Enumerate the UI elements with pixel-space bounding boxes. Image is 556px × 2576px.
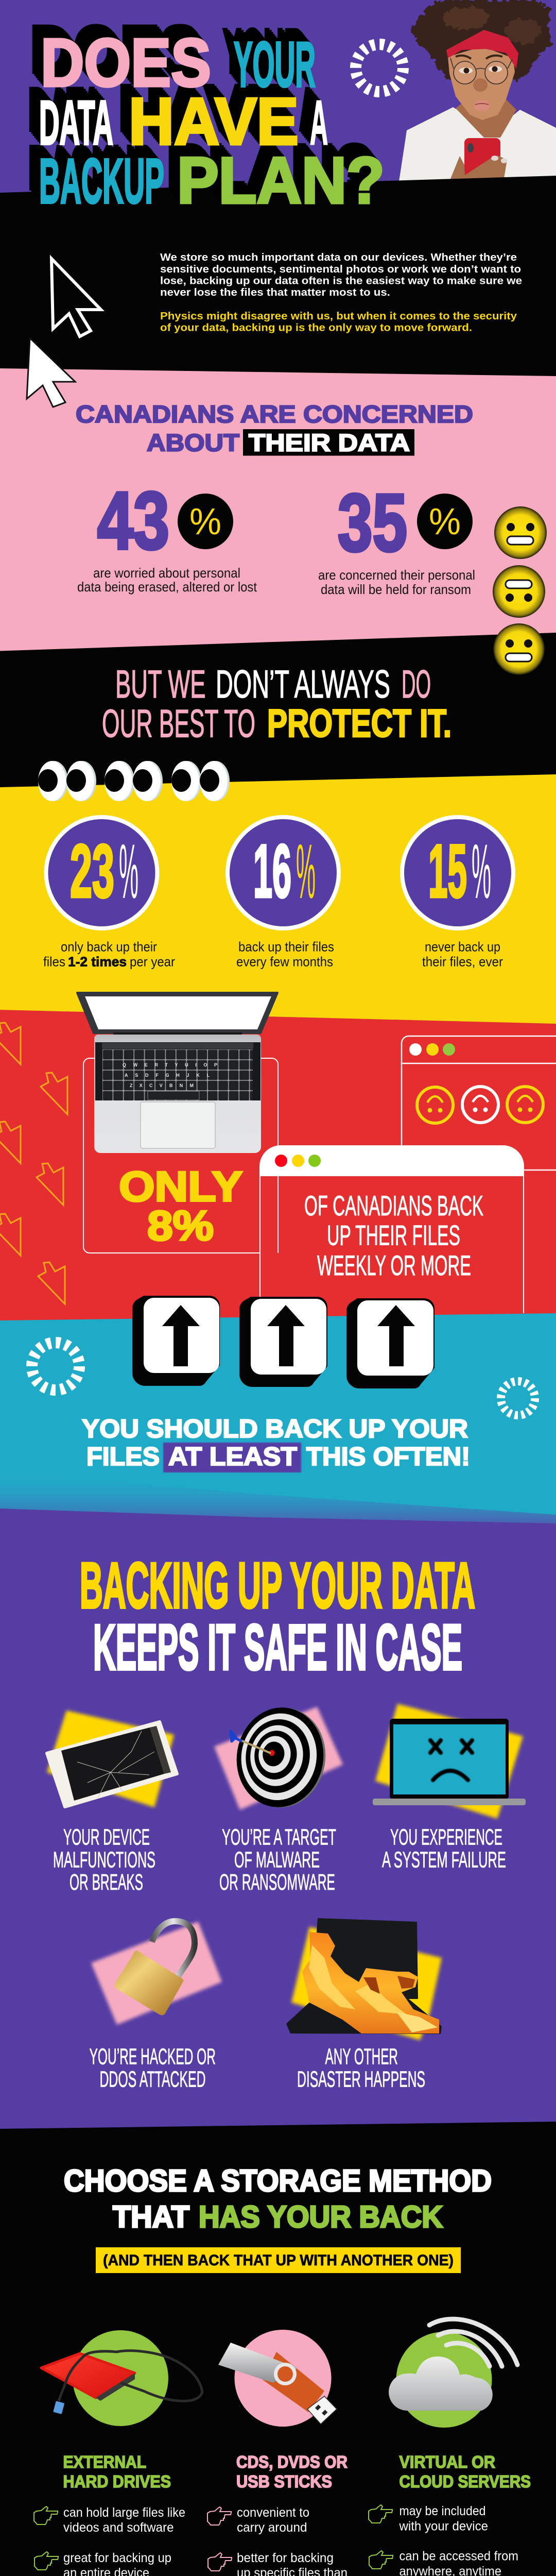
captions row two: DDOS ATTACKED bbox=[100, 2067, 206, 2092]
stat: 23 percent: per year bbox=[130, 954, 175, 970]
panel: you should back up bbox=[0, 1296, 556, 1523]
column: CDs, DVDs or USB sticks: CDS, DVDS OR bbox=[236, 2452, 348, 2471]
icon: upside-down grimacing emoji bbox=[493, 565, 545, 618]
stat: 35 percent: data will be held for ransom bbox=[321, 582, 471, 597]
illustration: laptop: ASDFGHJKL bbox=[125, 1073, 210, 1078]
stat: 23 percent: % bbox=[119, 828, 138, 914]
heading: THAT bbox=[113, 2200, 189, 2234]
stat: 15 percent bbox=[402, 817, 513, 970]
icon: open padlock bbox=[91, 1921, 222, 2025]
title: HAVE bbox=[129, 84, 299, 159]
icon: loading spinner bbox=[356, 44, 403, 92]
illustration: laptop: QWERTYUIOP bbox=[123, 1062, 217, 1067]
captions row one: YOUR DEVICE bbox=[63, 1825, 150, 1850]
stat: 43 percent: are worried about personal bbox=[93, 565, 240, 581]
icon: up arrow key bbox=[346, 1298, 435, 1388]
heading bbox=[76, 400, 473, 456]
illustration: laptop: ZXCVBNM bbox=[130, 1083, 194, 1088]
title: DATA bbox=[39, 88, 113, 158]
column: external hard drives: EXTERNAL bbox=[63, 2452, 146, 2471]
message text: THIS OFTEN! bbox=[306, 1442, 470, 1471]
captions row two: ANY OTHER bbox=[325, 2044, 398, 2069]
intro text: never lose the files that matter most to us. bbox=[160, 287, 390, 298]
captions row one: OF MALWARE bbox=[234, 1848, 320, 1872]
icon: cloud with wifi bbox=[389, 2319, 517, 2428]
stat: 15 percent: their files, ever bbox=[422, 954, 503, 970]
decorative cursors bbox=[0, 1023, 67, 1304]
icon: burning laptop bbox=[286, 1918, 442, 2040]
captions row one: YOU’RE A TARGET bbox=[222, 1825, 336, 1850]
message text: AT LEAST bbox=[168, 1442, 297, 1471]
intro text bbox=[160, 252, 522, 334]
intro text: Physics might disagree with us, but when it comes to the security bbox=[160, 311, 517, 322]
column: virtual or cloud servers: can be accessed from bbox=[399, 2549, 518, 2564]
icon: up arrow key bbox=[132, 1296, 220, 1386]
captions row two: DISASTER HAPPENS bbox=[297, 2067, 425, 2092]
window outline with only 8 percent bbox=[83, 1058, 278, 1253]
stat: 43 percent: % bbox=[189, 501, 221, 543]
column: external hard drives: videos and software bbox=[63, 2520, 174, 2535]
stat: 16 percent bbox=[228, 817, 339, 970]
heading bbox=[64, 2164, 492, 2234]
captions row one: OR BREAKS bbox=[70, 1870, 143, 1895]
heading bbox=[80, 1550, 475, 1684]
heading: THEIR DATA bbox=[249, 429, 410, 456]
column: external hard drives: can hold large files like bbox=[63, 2505, 185, 2520]
panel: intro bbox=[0, 25, 556, 376]
column: virtual or cloud servers: with your device bbox=[399, 2519, 488, 2534]
heading: DON’T ALWAYS bbox=[216, 663, 390, 706]
title bbox=[39, 25, 385, 217]
captions row two bbox=[90, 2044, 425, 2092]
stat: 23 percent bbox=[43, 817, 175, 970]
column: external hard drives: HARD DRIVES bbox=[63, 2472, 171, 2491]
heading: ABOUT bbox=[147, 429, 239, 456]
heading: DO bbox=[402, 663, 431, 706]
panel: only 8 percent bbox=[0, 993, 556, 1320]
icon: filled cursor bbox=[27, 338, 75, 407]
panel: Canadians are concerned bbox=[0, 338, 556, 651]
icon: loading spinner bbox=[32, 1343, 79, 1390]
title: BACKUP bbox=[39, 146, 164, 217]
window outline with smileys bbox=[402, 1036, 556, 1170]
stat: 15 percent: % bbox=[472, 828, 491, 914]
icon: googly eyes bbox=[38, 761, 230, 801]
column: CDs, DVDs or USB sticks: USB STICKS bbox=[236, 2472, 332, 2491]
icon: outlined cursor bbox=[51, 259, 101, 336]
window outline with only 8 percent: 8% bbox=[147, 1202, 214, 1249]
icon: loading spinner bbox=[501, 1381, 535, 1415]
intro text: of your data, backing up is the only way to move forward. bbox=[160, 323, 472, 334]
intro text: sensitive documents, sentimental photos or work we don’t want to bbox=[160, 264, 521, 275]
stat: 35 percent bbox=[318, 478, 475, 597]
icon: broken phone bbox=[47, 1710, 177, 1807]
icon: grimacing emoji bbox=[493, 623, 545, 675]
column: external hard drives bbox=[34, 2452, 185, 2576]
panel: how often Canadians back up bbox=[0, 761, 556, 1024]
column: external hard drives: great for backing up bbox=[63, 2551, 171, 2565]
stat: 16 percent: % bbox=[296, 828, 316, 914]
panel: we don't always protect it bbox=[0, 623, 556, 787]
stat: 23 percent: only back up their bbox=[61, 939, 157, 954]
heading: OUR BEST TO bbox=[102, 702, 255, 746]
stat: 23 percent: 23 bbox=[70, 829, 114, 913]
column: CDs, DVDs or USB sticks: convenient to bbox=[237, 2505, 309, 2520]
stat: 15 percent: 15 bbox=[428, 829, 467, 913]
icon: grimacing emoji bbox=[494, 506, 547, 559]
captions row two: YOU’RE HACKED OR bbox=[90, 2044, 216, 2069]
icon: external hard drive bbox=[41, 2330, 202, 2426]
heading: PROTECT IT. bbox=[267, 702, 451, 745]
stat: 16 percent: 16 bbox=[253, 829, 291, 913]
yellow subheading box: (AND THEN BACK THAT UP WITH ANOTHER ONE) bbox=[103, 2252, 454, 2269]
stat: 43 percent bbox=[77, 476, 257, 595]
window outline with only 8 percent: ONLY bbox=[119, 1163, 242, 1210]
column: virtual or cloud servers bbox=[369, 2452, 531, 2576]
photo: surprised woman looking at a phone bbox=[399, 0, 556, 181]
stat: 16 percent: every few months bbox=[236, 954, 333, 970]
icon: up arrow key bbox=[239, 1297, 327, 1387]
stat: 35 percent: are concerned their personal bbox=[318, 567, 475, 583]
message text bbox=[82, 1414, 470, 1471]
heading: CHOOSE A STORAGE METHOD bbox=[64, 2164, 492, 2198]
heading bbox=[102, 663, 451, 746]
title: A bbox=[310, 88, 328, 158]
message text: YOU SHOULD BACK UP YOUR bbox=[82, 1414, 468, 1443]
browser window with back-up message: UP THEIR FILES bbox=[327, 1219, 460, 1251]
browser window with back-up message bbox=[260, 1146, 524, 1313]
icon: USB stick bbox=[218, 2330, 337, 2427]
message text: FILES bbox=[86, 1442, 160, 1471]
yellow subheading box bbox=[96, 2247, 461, 2273]
illustration: laptop bbox=[77, 993, 277, 1153]
title: PLAN? bbox=[177, 144, 385, 217]
column: virtual or cloud servers: may be included bbox=[399, 2504, 486, 2518]
column: virtual or cloud servers: CLOUD SERVERS bbox=[399, 2472, 531, 2491]
highlight behind at least bbox=[163, 1443, 301, 1472]
stat: 15 percent: never back up bbox=[425, 939, 500, 954]
captions row one bbox=[53, 1825, 506, 1895]
captions row one: OR RANSOMWARE bbox=[219, 1870, 335, 1895]
intro text: lose, backing up our data often is the easiest way to make sure we bbox=[160, 275, 522, 286]
stat: 23 percent: files bbox=[43, 954, 65, 970]
stat: 35 percent: % bbox=[429, 501, 461, 543]
heading: BUT WE bbox=[115, 663, 206, 706]
panel: backing up keeps it safe bbox=[0, 1509, 556, 2129]
title: DOES bbox=[41, 25, 211, 100]
column: CDs, DVDs or USB sticks: carry around bbox=[237, 2520, 307, 2535]
captions row one: MALFUNCTIONS bbox=[53, 1848, 155, 1872]
icon: laptop with sad face bbox=[373, 1704, 526, 1819]
panel: hero background bbox=[0, 0, 556, 196]
column: virtual or cloud servers: VIRTUAL OR bbox=[399, 2452, 495, 2471]
stat: 35 percent: 35 bbox=[338, 478, 407, 568]
heading: HAS YOUR BACK bbox=[199, 2200, 443, 2234]
heading: CANADIANS ARE CONCERNED bbox=[76, 400, 473, 428]
icon: dartboard bbox=[214, 1701, 343, 1814]
stat: 16 percent: back up their files bbox=[238, 939, 334, 954]
column: CDs, DVDs or USB sticks bbox=[207, 2452, 348, 2576]
intro text: We store so much important data on our devices. Whether they’re bbox=[160, 252, 517, 263]
stat: 43 percent: 43 bbox=[97, 476, 169, 566]
title: YOUR bbox=[234, 29, 316, 100]
panel: storage methods bbox=[0, 2122, 556, 2576]
stat: 43 percent: data being erased, altered or lost bbox=[77, 579, 257, 595]
stat: 23 percent: 1-2 times bbox=[68, 954, 127, 970]
column: CDs, DVDs or USB sticks: better for backing bbox=[237, 2551, 334, 2565]
